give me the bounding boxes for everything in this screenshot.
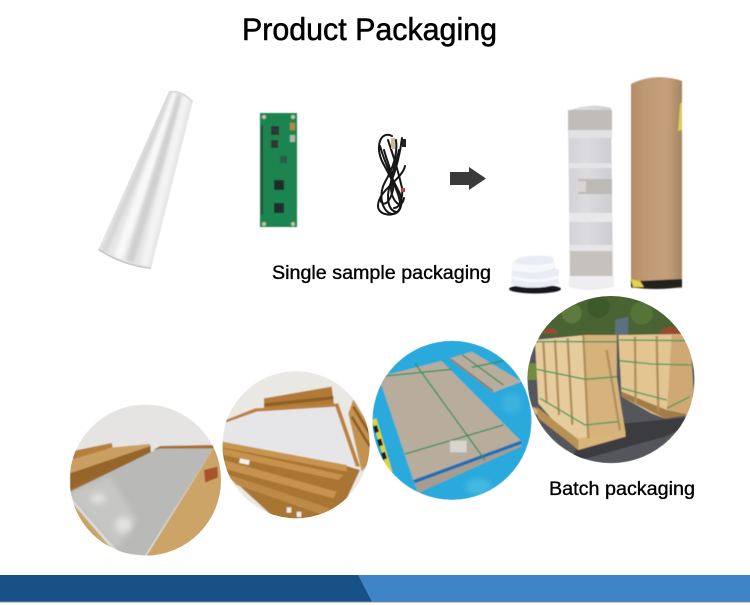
label: batch packaging: Batch packaging	[549, 478, 695, 500]
photo: sheets with cardboard, circle 1	[70, 404, 227, 560]
icon: right arrow	[450, 167, 486, 190]
icon: coiled black cable	[378, 135, 406, 215]
icon: rolled film tube	[98, 91, 193, 269]
title: Product Packaging	[242, 11, 497, 47]
icon: white foam end cap	[509, 256, 561, 294]
icon: white wrapped tube	[568, 106, 614, 290]
footer band	[0, 575, 750, 602]
photo: wooden crates outdoors, circle 4	[525, 293, 698, 463]
photo: boxed panels on blue floor, circle 3	[372, 341, 532, 500]
icon: green circuit board	[260, 113, 297, 227]
label: single sample packaging: Single sample packaging	[272, 262, 491, 284]
photo: stacked cardboard boxes, circle 2	[222, 371, 372, 520]
icon: brown cardboard tube	[631, 77, 682, 289]
